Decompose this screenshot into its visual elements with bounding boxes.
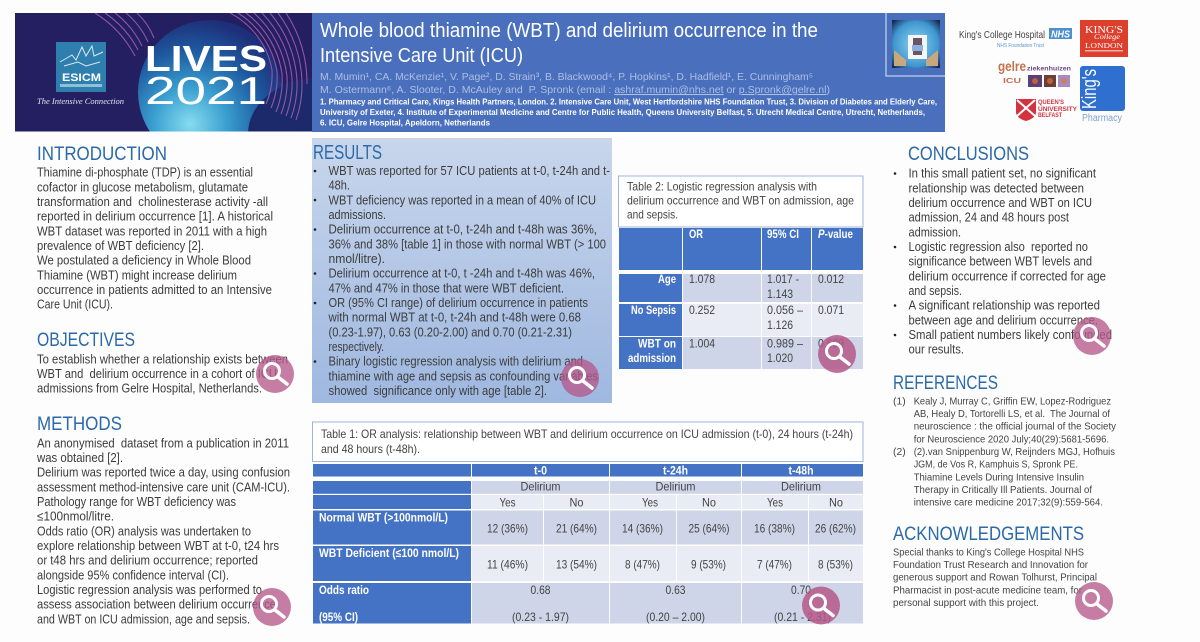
text: methods body: or t48 hrs and delirium occurrence; reported [37, 554, 258, 568]
authors: M. Mumin¹, CA. McKenzie¹, V. Page², D. Strain³, B. Blackwood⁴, P. Hopkins¹, D. Hadfield¹, E. Cunningham⁵ [320, 72, 813, 83]
table: OR analysis: 12 (36%) [487, 522, 528, 536]
text: results bullets: with normal WBT at t-0, t-24h and t-48h were 0.68 [328, 311, 581, 325]
table: logistic regression: 1.078 [689, 273, 715, 286]
text: references list: (2) [893, 447, 906, 458]
text: methods body: ≤100nmol/litre. [37, 510, 114, 524]
text: results bullets: 48h. [328, 179, 350, 193]
icon: magnifier results [561, 359, 599, 397]
text: conclusions bullets: Small patient numbers likely confounded [908, 328, 1112, 342]
logo: King's Pharmacy [1079, 66, 1125, 124]
text: conclusions bullets: delirium occurrence and WBT on ICU [908, 196, 1092, 210]
text: references list: Kealy J, Murray C, Griffin EW, Lopez-Rodriguez [914, 396, 1111, 407]
text: acknowledgements body: generous support and Rowan Tolhurst, Principal [893, 573, 1097, 584]
table: logistic regression: Age [658, 273, 676, 286]
text: conclusions bullets: relationship was detected between [908, 181, 1084, 195]
icon: thiamine bottle [886, 13, 945, 76]
table: OR analysis: 0.68 [530, 584, 550, 597]
text: results bullets: 47% and 47% in those that were WBT deficient. [328, 281, 564, 295]
table: OR analysis: Odds ratio [319, 584, 369, 597]
logo: King's College Hospital NHS: NHS Foundation Trust [997, 43, 1044, 49]
logo: Queen's University Belfast: QUEEN'S [1038, 100, 1064, 106]
table: OR analysis: WBT Deficient (≤100 nmol/L) [319, 547, 459, 560]
title: Whole blood thiamine (WBT) and delirium occurrence in the [320, 20, 818, 42]
table: logistic regression: No Sepsis [631, 304, 676, 317]
table: OR analysis: Normal WBT (>100nmol/L) [319, 512, 448, 525]
text: references list [893, 396, 1117, 509]
text: conclusions bullets: Logistic regression also reported no [908, 240, 1088, 254]
icon: magnifier objectives [256, 355, 294, 393]
text: methods body: Pathology range for WBT deficiency was [37, 495, 236, 509]
text: methods body: assessment method-intensive care unit (CAM-ICU). [37, 480, 290, 494]
header: title panel [312, 13, 945, 132]
text: results bullets: respectively. [328, 340, 384, 354]
text: methods body: assess association between delirium occurrence [37, 598, 276, 612]
table: logistic regression: WBT on [638, 338, 676, 350]
text: conclusions bullets: A significant relationship was reported [908, 299, 1100, 313]
table: logistic regression: OR [689, 228, 704, 241]
text: introduction body: cofactor in glucose metabolism, glutamate [37, 180, 248, 194]
panel: acknowledgements [893, 523, 1097, 609]
authors: M. Ostermann⁶, A. Slooter, D. McAuley and P. Spronk (email : ashraf.mumin@nhs.net or p.Spronk@gelre.nl) [320, 85, 830, 96]
text: introduction body [37, 166, 273, 312]
text: methods body: Odds ratio (OR) analysis was undertaken to [37, 524, 251, 538]
panel: conclusions [894, 143, 1112, 357]
table: OR analysis: (0.21 - 2.31) [774, 611, 831, 624]
text: methods body: Delirium was reported twice a day, using confusion [37, 466, 290, 480]
table: OR analysis: Delirium [520, 481, 560, 494]
text: methods body: Logistic regression analysis was performed to [37, 583, 262, 597]
logo: Gelre ziekenhuizen ICU: ziekenhuizen [1027, 66, 1071, 72]
text: references list: intensive care medicine 2017;32(9):559-564. [914, 498, 1103, 509]
table: logistic regression: 0.012 [818, 273, 844, 286]
icon: magnifier methods [253, 588, 291, 626]
text: conclusions bullets: delirium occurrence if corrected for age [908, 269, 1106, 283]
LIVES 2021 wordmark: 2021 [145, 70, 267, 113]
text: results bullets [314, 164, 610, 398]
panel: methods [36, 413, 290, 626]
text: results bullets: showed significance only with age [table 2]. [328, 384, 547, 398]
table: OR analysis: 7 (47%) [757, 558, 792, 572]
affiliations [320, 96, 937, 128]
text: conclusions bullets: our results. [908, 343, 964, 357]
logos [959, 20, 1128, 124]
icon: magnifier table 2 [818, 335, 856, 373]
text: introduction body: reported in delirium occurrence [1]. A historical [37, 210, 273, 224]
caption: table 1: and 48 hours (t-48h). [321, 443, 420, 456]
caption: table 2: and sepsis. [627, 209, 678, 222]
table: logistic regression: 0.689 [818, 338, 844, 350]
table: OR analysis: Yes [767, 496, 783, 509]
tagline: The Intensive Connection [37, 97, 124, 106]
text: conclusions bullets: admission, 24 and 48 hours post [908, 211, 1069, 225]
text: references list: (2).van Snippenburg W, Reijnders MGJ, Hofhuis [914, 447, 1115, 458]
table: logistic regression: 95% CI [767, 228, 799, 241]
text: results bullets: WBT deficiency was reported in a mean of 40% of ICU [328, 193, 596, 207]
text: acknowledgements body: Foundation Trust Research and Innovation for [893, 560, 1088, 571]
text: results bullets: WBT was reported for 57 ICU patients at t-0, t-24h and t- [328, 164, 610, 178]
text: objectives body: admissions from Gelre Hospital, Netherlands. [37, 382, 262, 396]
logo: Gelre ziekenhuizen ICU: gelre [998, 59, 1026, 74]
text: references list: (1) [893, 396, 906, 407]
icon: magnifier conclusions [1073, 317, 1111, 355]
text: results bullets: 36% and 38% [table 1] in those with normal WBT (> 100 [328, 237, 606, 251]
table: logistic regression: 0.071 [818, 304, 844, 317]
caption: table 1 [312, 422, 863, 462]
heading: references: REFERENCES [893, 372, 998, 394]
text: references list: Thiamine Levels During Intensive Insulin [914, 472, 1084, 483]
text: results bullets: admissions. [328, 208, 386, 222]
text: methods body: alongside 95% confidence interval (CI). [37, 568, 229, 582]
logo: King's College London: KING'S [1085, 24, 1123, 36]
text: methods body: An anonymised dataset from a publication in 2011 [37, 436, 289, 450]
heading: objectives: OBJECTIVES [37, 329, 135, 351]
text: acknowledgements body: Pharmacist in post-acute medicine team, for [893, 585, 1082, 596]
text: introduction body: occurrence in patients admitted to an Intensive [37, 283, 272, 297]
table: OR analysis: t-0 [534, 465, 547, 478]
text: results bullets: Delirium occurrence at t-0, t -24h and t-48h was 46%, [328, 267, 595, 281]
header: LIVES 2021 conference banner [15, 13, 312, 132]
table: logistic regression: 1.004 [689, 338, 715, 350]
text: conclusions bullets: and sepsis. [908, 284, 962, 298]
text: acknowledgements body: Special thanks to King's College Hospital NHS [893, 547, 1084, 558]
heading: results: RESULTS [313, 141, 382, 164]
table: logistic regression: 0.056 – [767, 304, 804, 317]
text: methods body [36, 436, 290, 626]
affiliations: University of Exeter, 4. Institute of Experimental Medicine and Centre for Public Health, Queens University Belfast, 5. Utrecht Medical Centre, Utrecht, Netherlands, [320, 107, 925, 117]
icon: ESICM logo: ESICM [62, 72, 101, 84]
table: OR analysis: 25 (64%) [688, 522, 730, 536]
table: OR analysis: No [570, 496, 584, 509]
authors [320, 72, 830, 96]
table: OR analysis: t-24h [663, 465, 688, 478]
table: logistic regression: 1.126 [767, 319, 793, 332]
table: OR analysis: (95% CI) [319, 611, 358, 624]
caption: table 2: Table 2: Logistic regression analysis with [627, 181, 817, 194]
text: objectives body: To establish whether a relationship exists between [37, 352, 288, 366]
logo: King's Pharmacy: King's [1079, 69, 1101, 109]
logo: King's College London: College [1094, 33, 1120, 41]
text: methods body: explore relationship between WBT at t-0, t24 hrs [37, 539, 279, 553]
icon: magnifier table 1 [802, 586, 840, 624]
table: OR analysis: 21 (64%) [556, 522, 597, 536]
table: OR analysis: t-48h [788, 465, 814, 478]
table: OR analysis: 11 (46%) [487, 558, 528, 572]
table: logistic regression [619, 228, 863, 369]
table: OR analysis: Delirium [781, 481, 821, 494]
panel: table 2 [618, 176, 863, 369]
logo: Queen's University Belfast: BELFAST [1038, 113, 1062, 119]
table: OR analysis: 16 (38%) [754, 522, 795, 536]
table: OR analysis: 13 (54%) [556, 558, 597, 572]
logo: Gelre ziekenhuizen ICU [998, 59, 1071, 87]
table: OR analysis: 26 (62%) [815, 522, 856, 536]
panel: table 1 [312, 422, 863, 624]
panel: results [312, 138, 612, 403]
text: introduction body: WBT dataset was reported in 2011 with a high [37, 224, 267, 238]
table: logistic regression: 1.017 - [767, 273, 799, 286]
text: conclusions bullets: significance between WBT levels and [908, 255, 1092, 269]
caption: table 1: Table 1: OR analysis: relationship between WBT and delirium occurrence on ICU admission (t-0), 24 hours (t-24h) [321, 428, 853, 441]
logo: King's College Hospital NHS [959, 28, 1072, 49]
logo: Gelre ziekenhuizen ICU: ICU [1003, 76, 1021, 85]
logo: King's College London [1080, 20, 1128, 57]
affiliations: 1. Pharmacy and Critical Care, Kings Health Partners, London. 2. Intensive Care Unit, West Hertfordshire NHS Foundation Trust, 3. Division of Diabetes and Elderly Care, [320, 96, 937, 106]
heading: methods: METHODS [37, 413, 122, 435]
text: references list: AB, Healy D, Tortorelli LS, et al. The Journal of [914, 409, 1110, 420]
table: logistic regression: P-value [818, 228, 853, 241]
icon: ESICM logo [56, 42, 106, 92]
logo: King's Pharmacy: Pharmacy [1082, 113, 1122, 124]
text: references list: Therapy in Critically Ill Patients. Journal of [914, 485, 1092, 496]
table: OR analysis [313, 464, 863, 624]
panel: references [893, 372, 1117, 509]
text: references list: neuroscience : the official journal of the Society [914, 422, 1117, 433]
table: OR analysis: 14 (36%) [622, 522, 663, 536]
table: logistic regression: admission [628, 352, 676, 365]
logo: King's College Hospital NHS: NHS [1051, 30, 1070, 40]
title [320, 20, 818, 67]
logo: King's College London: LONDON [1085, 41, 1124, 50]
table: logistic regression: 0.252 [689, 304, 715, 317]
logo: Queen's University Belfast [1016, 99, 1077, 121]
table: OR analysis: 8 (47%) [625, 558, 660, 572]
text: references list: JGM, de Vos R, Kamphuis S, Spronk PE. [914, 460, 1078, 471]
title: Intensive Care Unit (ICU) [320, 45, 523, 67]
text: conclusions bullets: In this small patient set, no significant [908, 167, 1096, 181]
text: conclusions bullets: between age and delirium occurrence. [908, 313, 1098, 327]
heading: introduction: INTRODUCTION [37, 143, 167, 165]
LIVES 2021 wordmark [148, 46, 266, 104]
logo: Queen's University Belfast: UNIVERSITY [1038, 107, 1077, 113]
table: OR analysis: Yes [500, 496, 516, 509]
text: results bullets: Binary logistic regression analysis with delirium and [328, 355, 583, 369]
affiliations: 6. ICU, Gelre Hospital, Apeldorn, Netherlands [320, 118, 490, 128]
table: logistic regression: 1.143 [767, 288, 793, 301]
text: introduction body: prevalence of WBT deficiency [2]. [37, 239, 204, 253]
table: OR analysis: 9 (53%) [691, 558, 726, 572]
text: results bullets: (0.23-1.97), 0.63 (0.20-2.00) and 0.70 (0.21-2.31) [328, 325, 572, 339]
text: methods body: was obtained [2]. [36, 451, 123, 465]
heading: acknowledgements: ACKNOWLEDGEMENTS [893, 523, 1084, 545]
text: introduction body: Thiamine (WBT) might increase delirium [37, 268, 237, 282]
table: OR analysis: Yes [642, 496, 658, 509]
table: OR analysis: 0.63 [666, 584, 686, 597]
text: results bullets: nmol/litre). [328, 252, 385, 266]
text: introduction body: Thiamine di-phosphate (TDP) is an essential [37, 166, 253, 180]
table: OR analysis: (0.23 - 1.97) [512, 611, 569, 624]
icon: magnifier acknowledgements [1075, 582, 1113, 620]
text: introduction body: Care Unit (ICU). [37, 298, 113, 312]
table: OR analysis: 8 (53%) [818, 558, 853, 572]
table: OR analysis: No [702, 496, 716, 509]
text: conclusions bullets [894, 167, 1112, 357]
text: introduction body: We postulated a deficiency in Whole Blood [37, 254, 251, 268]
text: results bullets: thiamine with age and sepsis as confounding variables [328, 369, 598, 383]
table: logistic regression: 0.989 – [767, 338, 804, 350]
text: acknowledgements body [893, 547, 1097, 609]
panel: introduction [37, 143, 273, 312]
text: references list: for Neuroscience 2020 July;40(29):5681-5696. [914, 434, 1109, 445]
text: introduction body: transformation and cholinesterase activity -all [37, 195, 268, 209]
logo: King's College Hospital NHS: King's College Hospital [959, 29, 1045, 41]
text: acknowledgements body: personal support with this project. [893, 598, 1039, 609]
text: results bullets: OR (95% CI range) of delirium occurrence in patients [328, 296, 588, 310]
text: results bullets: Delirium occurrence at t-0, t-24h and t-48h was 36%, [328, 223, 597, 237]
text: conclusions bullets: admission. [908, 225, 961, 239]
text: objectives body: WBT and delirium occurrence in a cohort of ICU [37, 367, 277, 381]
heading: conclusions: CONCLUSIONS [908, 143, 1029, 165]
table: OR analysis: No [829, 496, 843, 509]
caption: table 2: delirium occurrence and WBT on admission, age [627, 195, 854, 208]
table: OR analysis: (0.20 – 2.00) [646, 611, 705, 624]
caption: table 2 [618, 176, 863, 227]
text: methods body: and WBT on ICU admission, age and sepsis. [37, 612, 250, 626]
panel: objectives [37, 329, 288, 396]
text: objectives body [37, 352, 288, 396]
table: logistic regression: 1.020 [767, 352, 793, 365]
LIVES 2021 wordmark: LIVES [145, 38, 267, 79]
table: OR analysis: Delirium [656, 481, 696, 494]
table: OR analysis: 0.70 [791, 584, 811, 597]
